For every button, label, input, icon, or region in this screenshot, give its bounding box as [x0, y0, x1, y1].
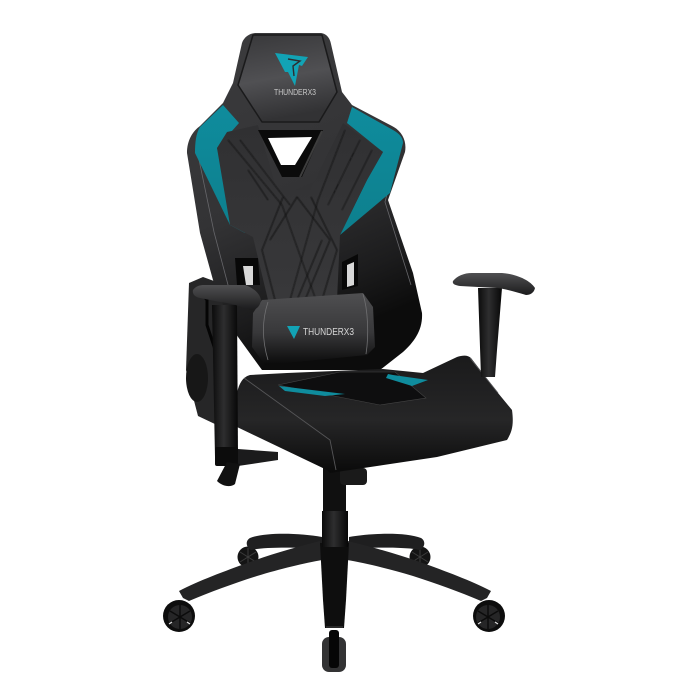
seat height lever — [217, 449, 278, 486]
strap slot left — [235, 258, 260, 285]
caster: front left — [163, 600, 195, 632]
back side panel and recline dial — [186, 277, 240, 425]
right armrest — [453, 273, 535, 377]
headrest logo mark — [275, 53, 308, 86]
backrest centre panel with stitching — [217, 123, 383, 300]
teal side panel right — [340, 107, 403, 235]
left armrest — [193, 285, 261, 466]
teal side panel left — [195, 105, 245, 233]
headrest brand name: THUNDERX3 — [274, 88, 316, 97]
backrest shell — [187, 33, 422, 370]
gas lift column — [322, 465, 367, 547]
strap slot right — [342, 254, 358, 290]
seat teal inlay right — [386, 374, 428, 386]
base: rear legs — [247, 534, 424, 550]
caster: rear right — [410, 546, 430, 568]
pillow brand name: THUNDERX3 — [303, 327, 354, 338]
caster: rear left — [238, 546, 258, 568]
caster: front centre — [322, 630, 346, 672]
caster: front right — [473, 600, 505, 632]
headrest pad — [238, 35, 337, 122]
neck opening — [258, 130, 323, 177]
pillow logo mark — [287, 326, 300, 339]
seat teal inlay left — [279, 386, 345, 396]
seat cushion — [236, 356, 513, 473]
lumbar pillow — [252, 293, 375, 365]
base: front legs — [179, 541, 491, 628]
